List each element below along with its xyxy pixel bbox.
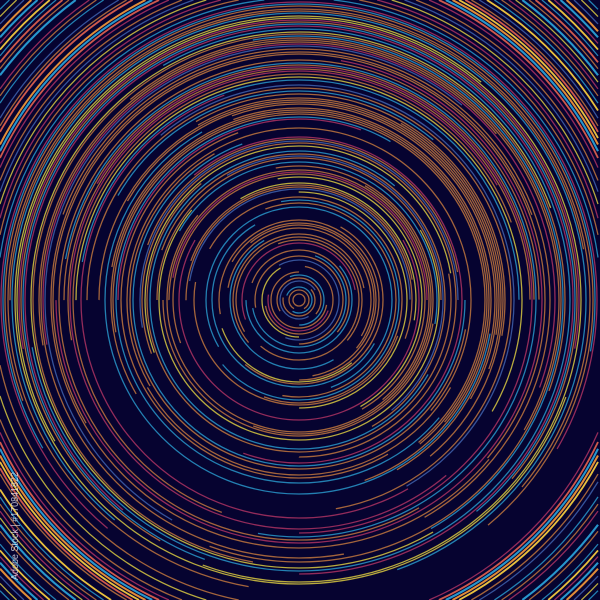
middle rings bbox=[38, 35, 564, 563]
inner rings bbox=[241, 239, 360, 361]
watermark text: Adobe Stock | #170841822 bbox=[9, 472, 21, 580]
